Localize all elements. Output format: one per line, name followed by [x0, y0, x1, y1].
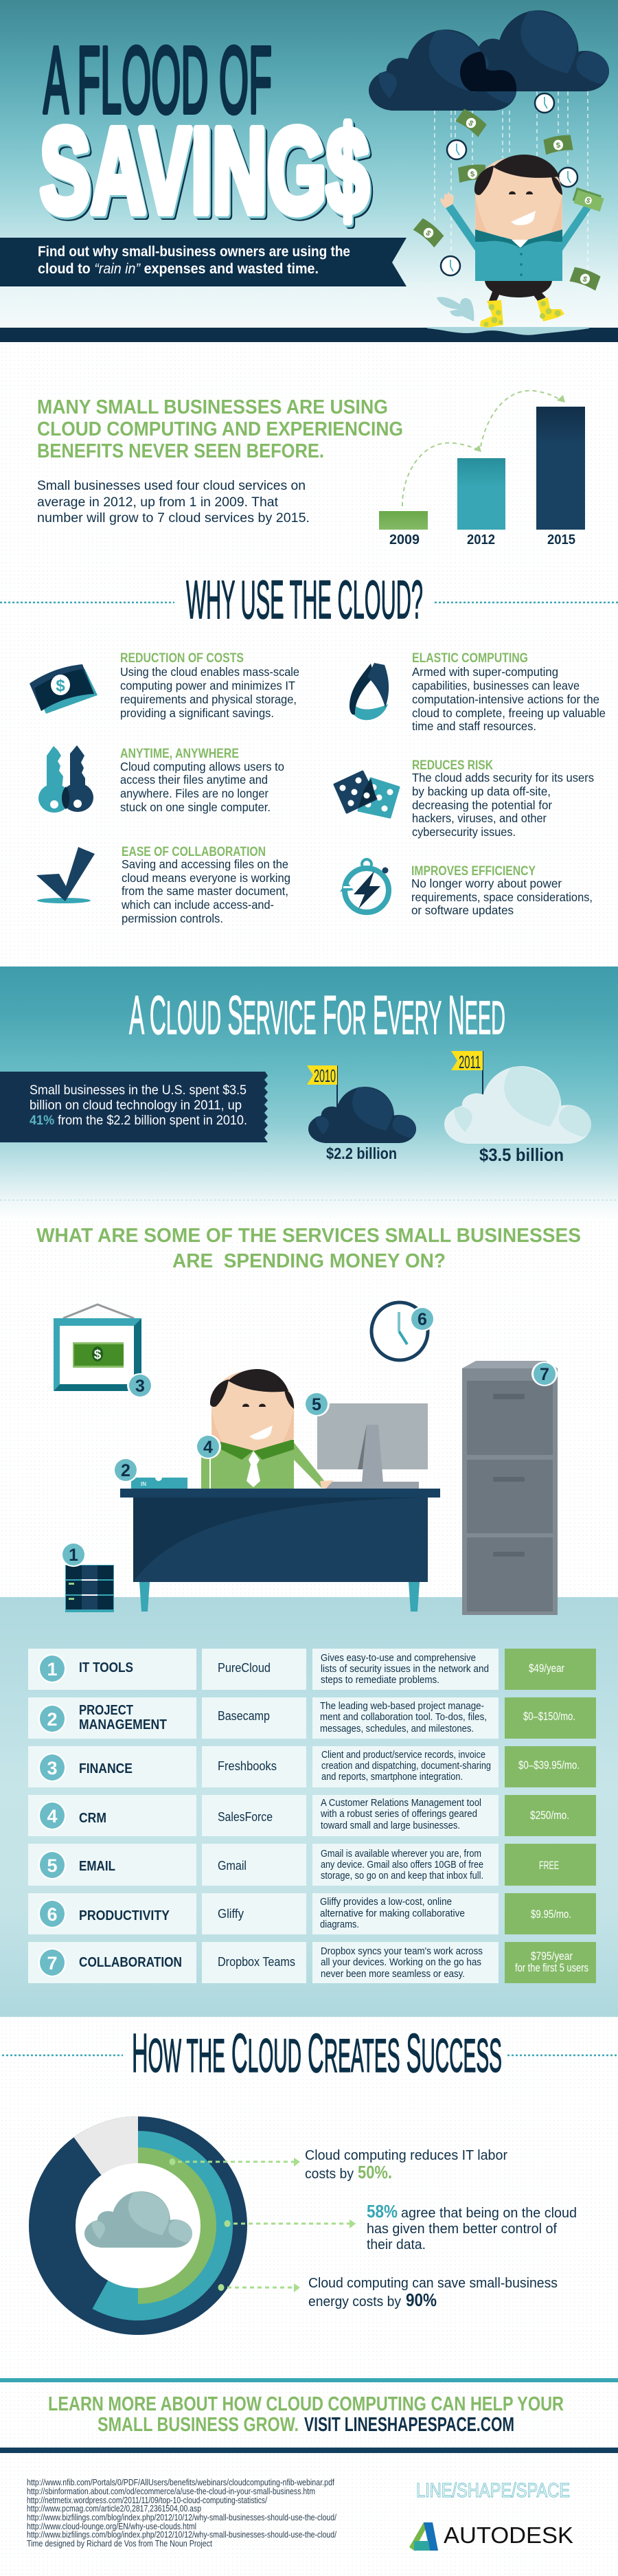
numbered markers: 7 [540, 1365, 549, 1384]
row 4: crm: A Customer Relations Management tool [321, 1797, 481, 1809]
callout: 50 percent: 50%. [358, 2162, 392, 2182]
intro body text: average in 2012, up from 1 in 2009. That [37, 495, 279, 510]
row 2: project management: Basecamp [218, 1709, 270, 1723]
callout: 90 percent [218, 2276, 558, 2310]
sources list: Time designed by Richard de Vos from The Noun Project [27, 2538, 212, 2549]
row 3: finance: FINANCE [79, 1761, 133, 1776]
row 6: productivity: PRODUCTIVITY [79, 1908, 170, 1923]
benefit: reduction of costs [120, 651, 299, 720]
numbered markers: 5 [312, 1395, 321, 1414]
row 5: email: any device. Gmail also offers 10GB of free [321, 1859, 483, 1871]
row 4: crm: SalesForce [218, 1810, 273, 1824]
sources list: http://www.bizfilings.com/blog/index.php/2012/10/12/why-small-businesses-should-use-the-cloud/ [27, 2529, 336, 2540]
row 1: it tools: Gives easy-to-use and comprehensive [321, 1652, 476, 1664]
benefit: elastic computing: ELASTIC COMPUTING [412, 651, 528, 666]
icon: elastic band [350, 663, 389, 720]
section heading: A CLOUD SERVICE FOR EVERY NEED [129, 984, 505, 1046]
icon: keys [38, 745, 93, 813]
row 2: project management: MANAGEMENT [79, 1717, 167, 1732]
row 3: finance: $0–$39.95/mo. [518, 1759, 580, 1772]
row 3: finance [28, 1746, 596, 1787]
benefits panel [30, 651, 606, 925]
callout: 50 percent [169, 2148, 507, 2182]
benefit: reduction of costs: requirements and physical storage, [120, 692, 297, 706]
icon: money bill: $ [56, 677, 65, 695]
row 2: project management: 2 [47, 1709, 58, 1730]
row 6: productivity: 6 [47, 1904, 58, 1925]
callout: spending ribbon: billion on cloud technology in 2011, up [30, 1098, 242, 1113]
benefit: elastic computing: computation-intensive actions for the [412, 692, 599, 706]
benefit: anytime anywhere: anywhere. Files are no longer [120, 787, 268, 800]
in tray: IN [141, 1481, 146, 1487]
bar chart: 2012 [467, 532, 495, 547]
row 6: productivity: diagrams. [320, 1919, 359, 1930]
falling bills: $ [470, 170, 475, 179]
row 3: finance: Freshbooks [218, 1759, 277, 1773]
sources list: http://www.bizfilings.com/blog/index.php/2012/10/12/why-small-businesses-should-use-the-cloud/ [27, 2512, 336, 2522]
title line: savings: SAVING$ [40, 104, 369, 238]
cloud: 2010 value: $2.2 billion [326, 1144, 397, 1162]
sources list: http://www.nfib.com/Portals/0/PDF/AllUsers/benefits/webinars/cloudcomputing-nfib-webinar.pdf [27, 2477, 334, 2487]
benefit: reduction of costs: REDUCTION OF COSTS [120, 651, 244, 666]
row 7: collaboration: Dropbox Teams [218, 1955, 295, 1969]
benefit: reduces risk: hackers, viruses, and other [412, 811, 547, 825]
logo: autodesk: AUTODESK [444, 2522, 573, 2548]
subtitle ribbon: Find out why small-business owners are using the [38, 244, 350, 260]
row 6: productivity: Gliffy provides a low-cost, online [320, 1896, 452, 1908]
callout: 58 percent: agree that being on the cloud [401, 2206, 577, 2221]
benefit: elastic computing: time and staff resources. [412, 719, 536, 733]
row 2: project management: $0–$150/mo. [523, 1710, 575, 1723]
title line: savings: SAVING$ [43, 107, 371, 242]
benefit: ease of collaboration: permission controls. [122, 912, 223, 925]
benefit: improves efficiency: IMPROVES EFFICIENCY [411, 864, 536, 879]
row 7: collaboration [28, 1942, 596, 1983]
intro body text: number will grow to 7 cloud services by 2015. [37, 511, 310, 526]
bar chart: 2009 [389, 532, 420, 547]
row 1: it tools: 1 [47, 1659, 58, 1680]
benefit: elastic computing [412, 651, 606, 733]
callout: 58 percent: 58% [367, 2201, 398, 2222]
benefit: reduces risk: cybersecurity issues. [412, 825, 516, 839]
row 2: project management: The leading web-based project manage- [320, 1700, 484, 1712]
benefit: improves efficiency: or software updates [411, 903, 514, 917]
cloud: 2010 value [307, 1065, 416, 1162]
desk [120, 1489, 440, 1612]
row 5: email: storage, so go on and keep that inbox full. [321, 1870, 483, 1882]
logo: autodesk [409, 2522, 573, 2551]
puddle [427, 327, 589, 335]
row 3: finance: Client and product/service records, invoice [321, 1749, 485, 1761]
radial chart [29, 2116, 247, 2335]
row 4: crm [28, 1795, 596, 1836]
row 7: collaboration: Dropbox syncs your team's work across [321, 1945, 483, 1957]
row 6: productivity: Gliffy [218, 1907, 244, 1921]
callout: spending ribbon [0, 1072, 268, 1142]
falling clocks [441, 93, 577, 275]
subtitle ribbon [0, 238, 407, 286]
sources list [27, 2477, 336, 2549]
callout: 50 percent: costs by [305, 2167, 354, 2182]
bar chart: 2015 [547, 532, 575, 547]
intro heading [37, 396, 403, 462]
benefit: ease of collaboration [121, 845, 290, 925]
splash [437, 297, 474, 321]
benefit: anytime anywhere: stuck on one single computer. [120, 800, 271, 814]
row 1: it tools: $49/year [529, 1662, 564, 1675]
benefit: reduction of costs: Using the cloud enables mass-scale [120, 665, 299, 679]
row 7: collaboration: COLLABORATION [79, 1955, 182, 1970]
sources list: http://sbinformation.about.com/od/ecommerce/a/use-the-cloud-in-your-small-business.htm [27, 2486, 315, 2496]
services table [28, 1649, 596, 1983]
row 1: it tools: lists of security issues in the network and [321, 1663, 489, 1675]
storm clouds [369, 10, 609, 111]
character: man at desk [201, 1369, 334, 1489]
row 2: project management: ment and collaboration tool. To-dos, files, [320, 1711, 487, 1723]
row 3: finance: creation and dispatching, document-sharing [321, 1760, 491, 1772]
row 7: collaboration: $795/year [531, 1950, 573, 1963]
numbered markers: 2 [121, 1461, 130, 1480]
row 6: productivity: alternative for making collaborative [320, 1908, 465, 1919]
row 5: email: FREE [539, 1860, 559, 1872]
hero panel: A FLOOD OF [43, 27, 272, 133]
row 5: email: EMAIL [79, 1859, 115, 1874]
callout: 90 percent: energy costs by [308, 2294, 401, 2309]
benefit: elastic computing: capabilities, businesses can leave [412, 679, 580, 692]
benefit: reduction of costs: providing a significant savings. [120, 706, 274, 720]
row 1: it tools: IT TOOLS [79, 1660, 133, 1675]
row 4: crm: with a robust series of offerings geared [320, 1808, 477, 1820]
sources list: http://www.pcmag.com/article2/0,2817,2361504,00.asp [27, 2503, 201, 2513]
row 7: collaboration: 7 [47, 1953, 58, 1974]
numbered markers: 1 [69, 1546, 78, 1565]
falling bills: $ [466, 119, 474, 128]
floor band [0, 1597, 618, 2017]
title line: savings [40, 104, 371, 242]
callout: 58 percent [224, 2201, 577, 2252]
callout: 58 percent: has given them better control of [367, 2222, 557, 2237]
row 1: it tools: PureCloud [218, 1661, 271, 1675]
cloud: 2011 value [444, 1051, 591, 1165]
benefit: reduces risk: by backing up data off-site, [412, 784, 551, 798]
rain lines [435, 91, 588, 275]
falling bills: $ [424, 229, 433, 238]
callout: 90 percent: Cloud computing can save small-business [308, 2276, 558, 2291]
section heading: services [36, 1225, 581, 1272]
icon: money bill [30, 664, 98, 714]
in tray [131, 1474, 187, 1489]
numbered markers [60, 1307, 558, 1567]
cloud: 2011 value: $3.5 billion [479, 1144, 564, 1165]
icon: check mark [36, 847, 95, 903]
benefit: anytime anywhere: access their files anytime and [120, 773, 268, 787]
row 4: crm: CRM [79, 1811, 106, 1826]
cloud: 2010 value: 2010 [314, 1065, 336, 1086]
bar chart [379, 391, 585, 547]
character: man in the rain: $ [585, 197, 591, 205]
callout: spending ribbon: Small businesses in the U.S. spent $3.5 [30, 1083, 247, 1098]
row 3: finance: 3 [47, 1758, 58, 1778]
call to action: SMALL BUSINESS GROW. [98, 2414, 299, 2436]
row 1: it tools [28, 1649, 596, 1690]
intro body text [37, 479, 310, 526]
benefit: reduces risk: The cloud adds security for its users [412, 771, 594, 784]
row 5: email: Gmail is available wherever you are, from [321, 1848, 481, 1860]
row 2: project management: PROJECT [79, 1703, 133, 1718]
benefit: improves efficiency: No longer worry about power [411, 877, 562, 890]
wall clock [371, 1302, 428, 1360]
section heading: services: ARE SPENDING MONEY ON? [172, 1250, 446, 1272]
section heading: services: WHAT ARE SOME OF THE SERVICES SMALL BUSINESSES [36, 1225, 581, 1247]
icon: stopwatch [340, 859, 389, 912]
row 2: project management: messages, schedules, and milestones. [320, 1723, 474, 1735]
callout: 58 percent: their data. [367, 2237, 426, 2252]
filing cabinet [462, 1361, 558, 1615]
section heading: how the cloud creates success: HOW THE CLOUD CREATES SUCCESS [132, 2022, 502, 2083]
benefit: ease of collaboration: from the same master document, [122, 884, 288, 898]
numbered markers: 4 [203, 1438, 213, 1457]
panel: a cloud service for every need [0, 967, 618, 1221]
benefit: ease of collaboration: Saving and accessing files on the [122, 857, 288, 871]
benefit: elastic computing: cloud to complete, freeing up valuable [412, 706, 606, 720]
numbered markers: 6 [417, 1310, 427, 1329]
callout: 50 percent: Cloud computing reduces IT labor [305, 2148, 507, 2163]
intro heading: CLOUD COMPUTING AND EXPERIENCING [37, 418, 403, 440]
row 7: collaboration: for the first 5 users [515, 1962, 588, 1974]
benefit: elastic computing: Armed with super-computing [412, 665, 558, 679]
office scene [54, 1302, 558, 1615]
icon: dice [334, 771, 399, 817]
row 6: productivity [28, 1893, 596, 1934]
intro body text: Small businesses used four cloud services on [37, 479, 306, 493]
row 3: finance: and reports, smartphone integration. [321, 1771, 463, 1783]
intro heading: MANY SMALL BUSINESSES ARE USING [37, 396, 388, 418]
benefit: reduces risk [412, 758, 594, 839]
benefit: reduction of costs: computing power and minimizes IT [120, 679, 295, 692]
benefit: reduces risk: decreasing the potential for [412, 798, 552, 812]
benefit: improves efficiency [411, 864, 593, 917]
call to action: VISIT LINESHAPESPACE.COM [304, 2414, 514, 2436]
sources list: http://www.cloud-lounge.org/EN/why-use-clouds.html [27, 2521, 196, 2531]
benefit: anytime anywhere [120, 747, 284, 814]
row 1: it tools: steps to remediate problems. [321, 1674, 439, 1686]
benefit: improves efficiency: requirements, space considerations, [411, 890, 593, 904]
row 5: email: Gmail [218, 1859, 247, 1873]
computer monitor [317, 1403, 428, 1489]
cloud: 2011 value: 2011 [459, 1052, 481, 1072]
falling bills: $ [582, 275, 588, 284]
sources list: http://netmetix.wordpress.com/2011/11/09/top-10-cloud-computing-statistics/ [27, 2495, 267, 2505]
logo: line shape space: LINE/SHAPE/SPACE [416, 2480, 570, 2502]
callout: 90 percent: 90% [406, 2290, 437, 2310]
framed money picture [54, 1304, 141, 1391]
benefit: anytime anywhere: ANYTIME, ANYWHERE [120, 747, 239, 761]
row 5: email [28, 1844, 596, 1886]
benefit: ease of collaboration: cloud means everyone is working [122, 871, 290, 885]
subtitle ribbon: cloud to “rain in” expenses and wasted time. [38, 261, 319, 277]
row 4: crm: toward small and large businesses. [321, 1820, 460, 1831]
intro heading: BENEFITS NEVER SEEN BEFORE. [37, 440, 324, 462]
row 6: productivity: $9.95/mo. [531, 1908, 571, 1921]
server rack [65, 1565, 114, 1612]
row 5: email: 5 [47, 1855, 58, 1876]
benefit: ease of collaboration: EASE OF COLLABORATION [122, 845, 266, 859]
benefit: reduces risk: REDUCES RISK [412, 758, 493, 773]
row 4: crm: 4 [47, 1806, 58, 1827]
benefit: ease of collaboration: which can include access-and- [121, 898, 274, 912]
row 7: collaboration: never been more seamless or easy. [321, 1968, 465, 1980]
callout: spending ribbon: 41% from the $2.2 billion spent in 2010. [30, 1114, 247, 1128]
title line: savings: SAVING$ [41, 106, 370, 240]
call to action [0, 2378, 618, 2453]
framed money picture: $ [94, 1348, 102, 1362]
falling bills: $ [556, 142, 561, 150]
row 4: crm: $250/mo. [530, 1809, 569, 1822]
benefit: anytime anywhere: Cloud computing allows users to [120, 760, 284, 773]
numbered markers: 3 [135, 1377, 145, 1396]
character: man in the rain [440, 155, 605, 328]
hero panel [0, 0, 618, 342]
falling bills [413, 108, 601, 291]
row 2: project management [28, 1697, 596, 1739]
intro panel [37, 391, 585, 547]
row 7: collaboration: all your devices. Working on the go has [321, 1956, 481, 1968]
